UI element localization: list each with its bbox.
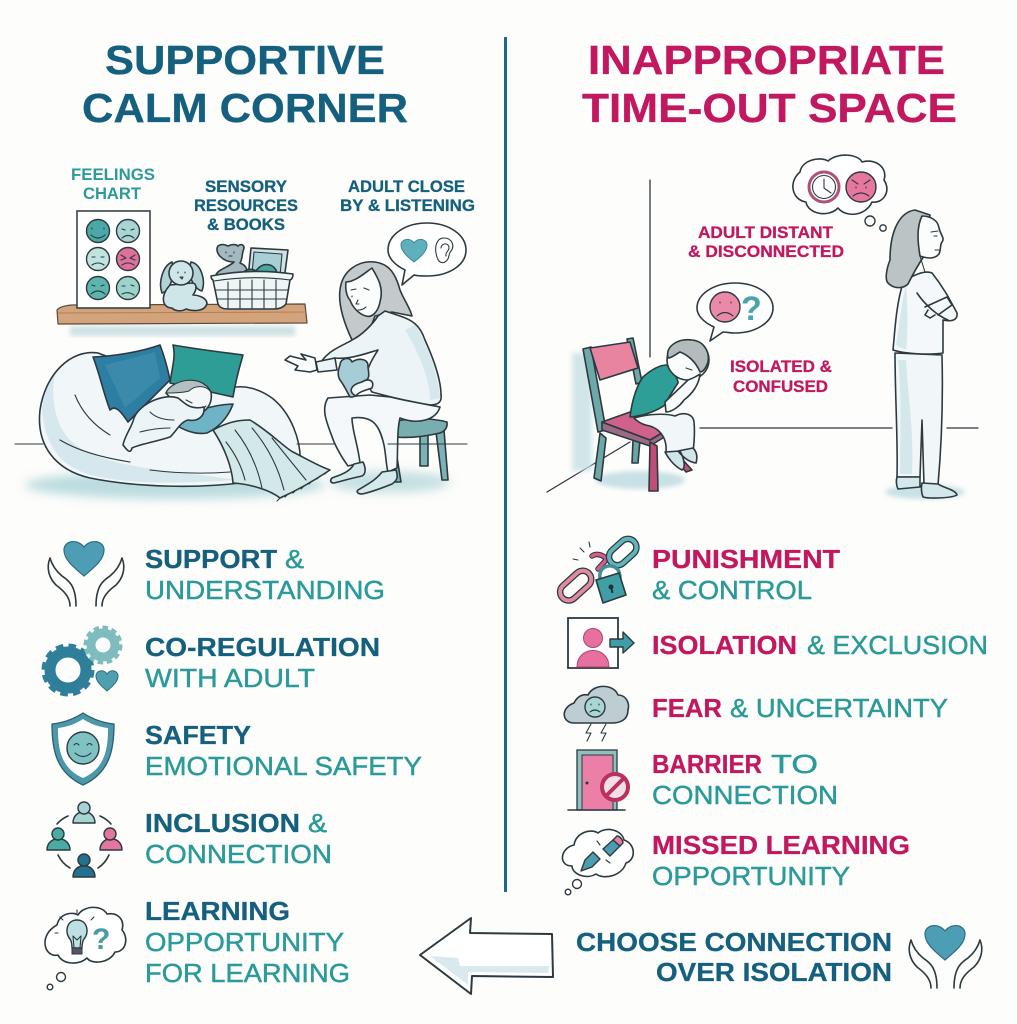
list: five supportive qualities (44, 542, 422, 990)
item: isolation and exclusion: & EXCLUSION (807, 630, 988, 660)
seated adult with teddy and stool (285, 262, 450, 494)
title: supportive calm corner: SUPPORTIVE (105, 37, 385, 83)
title: inappropriate time-out space: TIME-OUT SPACE (582, 85, 957, 131)
item: isolation and exclusion (568, 618, 988, 668)
icon: thought cloud with bulb: ? (92, 923, 110, 956)
icon: hands and heart (909, 926, 982, 988)
item: barrier to connection (568, 749, 838, 810)
center divider (504, 37, 507, 892)
item: missed learning opportunity (562, 829, 910, 895)
item: support and understanding: SUPPORT (145, 544, 277, 574)
item: co-regulation with adult: CO-REGULATION (145, 632, 380, 662)
label: adult distant and disconnected (688, 223, 844, 261)
icon: door with no sign (568, 750, 628, 810)
item: fear and uncertainty (564, 686, 948, 741)
label: isolated and confused: ISOLATED & (730, 357, 832, 376)
basket with bear and books (211, 244, 293, 309)
panel: inappropriate time-out space (547, 37, 988, 895)
icon: gears and heart (44, 628, 120, 694)
item: inclusion and connection: & (308, 808, 327, 838)
icon: broken chain with lock (557, 535, 640, 604)
label: isolated and confused: CONFUSED (733, 377, 828, 396)
seated child with head in hands (630, 340, 709, 470)
item: learning opportunity: OPPORTUNITY (145, 927, 344, 957)
call to action: choose connection over isolation: OVER ISOLATION (656, 957, 892, 987)
item: co-regulation with adult: WITH ADULT (145, 663, 315, 693)
item: barrier to connection: TO (771, 749, 818, 779)
item: inclusion and connection: INCLUSION (145, 808, 300, 838)
item: punishment and control: PUNISHMENT (652, 544, 840, 574)
item: isolation and exclusion: ISOLATION (652, 630, 797, 660)
label: feelings chart (71, 165, 155, 203)
item: fear and uncertainty: & UNCERTAINTY (730, 693, 948, 723)
item: support and understanding: & (285, 544, 304, 574)
item: support and understanding (48, 542, 385, 606)
label: isolated and confused (730, 357, 832, 396)
label: feelings chart: CHART (83, 184, 142, 203)
standing adult with arms crossed (885, 210, 965, 499)
speech bubble: sad face and question (697, 283, 773, 341)
icon: shield with smile (52, 713, 114, 785)
item: punishment and control (557, 535, 840, 605)
item: missed learning opportunity: OPPORTUNITY (652, 861, 850, 891)
label: sensory resources and books: SENSORY (205, 177, 288, 196)
speech bubble: sad face and question: ? (741, 290, 762, 328)
item: safety (52, 713, 422, 785)
chair (572, 338, 692, 491)
panel: supportive calm corner (15, 37, 475, 990)
item: learning opportunity (45, 896, 350, 990)
item: missed learning opportunity: MISSED LEARNING (652, 830, 910, 860)
item: support and understanding: UNDERSTANDING (145, 575, 385, 605)
call to action: choose connection over isolation: CHOOSE CONNECTION (576, 927, 892, 957)
arrow pointing left (420, 918, 553, 994)
label: adult close by and listening: ADULT CLOSE (348, 177, 465, 196)
icon: thought cloud with broken pencil (562, 829, 633, 895)
item: fear and uncertainty: FEAR (652, 693, 722, 723)
item: barrier to connection: BARRIER (652, 749, 762, 779)
label: adult distant and disconnected: & DISCONNECTED (688, 242, 844, 261)
title: supportive calm corner (82, 37, 408, 131)
list: five harmful qualities (557, 535, 988, 895)
floor line left (15, 443, 467, 445)
item: co-regulation with adult (44, 628, 380, 694)
icon: storm cloud with sad face (564, 686, 629, 741)
title: inappropriate time-out space (582, 37, 957, 131)
shelf (57, 304, 307, 336)
call to action: choose connection over isolation (576, 926, 982, 988)
item: punishment and control: & CONTROL (652, 575, 812, 605)
item: learning opportunity: LEARNING (145, 896, 290, 926)
icon: thought cloud with bulb (45, 907, 126, 990)
title: inappropriate time-out space: INAPPROPRIATE (588, 37, 945, 83)
item: inclusion and connection: CONNECTION (145, 839, 332, 869)
item: barrier to connection: CONNECTION (652, 780, 838, 810)
item: inclusion and connection (47, 802, 332, 877)
item: learning opportunity: FOR LEARNING (145, 958, 350, 988)
feelings chart poster (77, 211, 150, 308)
label: sensory resources and books: RESOURCES (194, 196, 298, 215)
speech bubble: heart and ear (388, 223, 466, 285)
label: sensory resources and books: & BOOKS (207, 215, 285, 234)
icon: hands and heart (48, 542, 124, 606)
stuffed bunny (161, 261, 207, 311)
bean bag with pillows and sleeping child (25, 345, 330, 501)
icon: circle of people (47, 802, 122, 877)
room lines (547, 180, 978, 492)
thought cloud: clock and angry face (793, 155, 887, 231)
label: adult close by and listening: BY & LISTENING (340, 196, 475, 215)
icon: person leaving box (568, 618, 634, 668)
label: adult close by and listening (340, 177, 475, 215)
item: safety: SAFETY (145, 720, 251, 750)
title: supportive calm corner: CALM CORNER (82, 85, 408, 131)
label: adult distant and disconnected: ADULT DISTANT (698, 223, 834, 242)
item: safety: EMOTIONAL SAFETY (145, 751, 422, 781)
label: feelings chart: FEELINGS (71, 165, 155, 184)
label: sensory resources and books (194, 177, 298, 234)
